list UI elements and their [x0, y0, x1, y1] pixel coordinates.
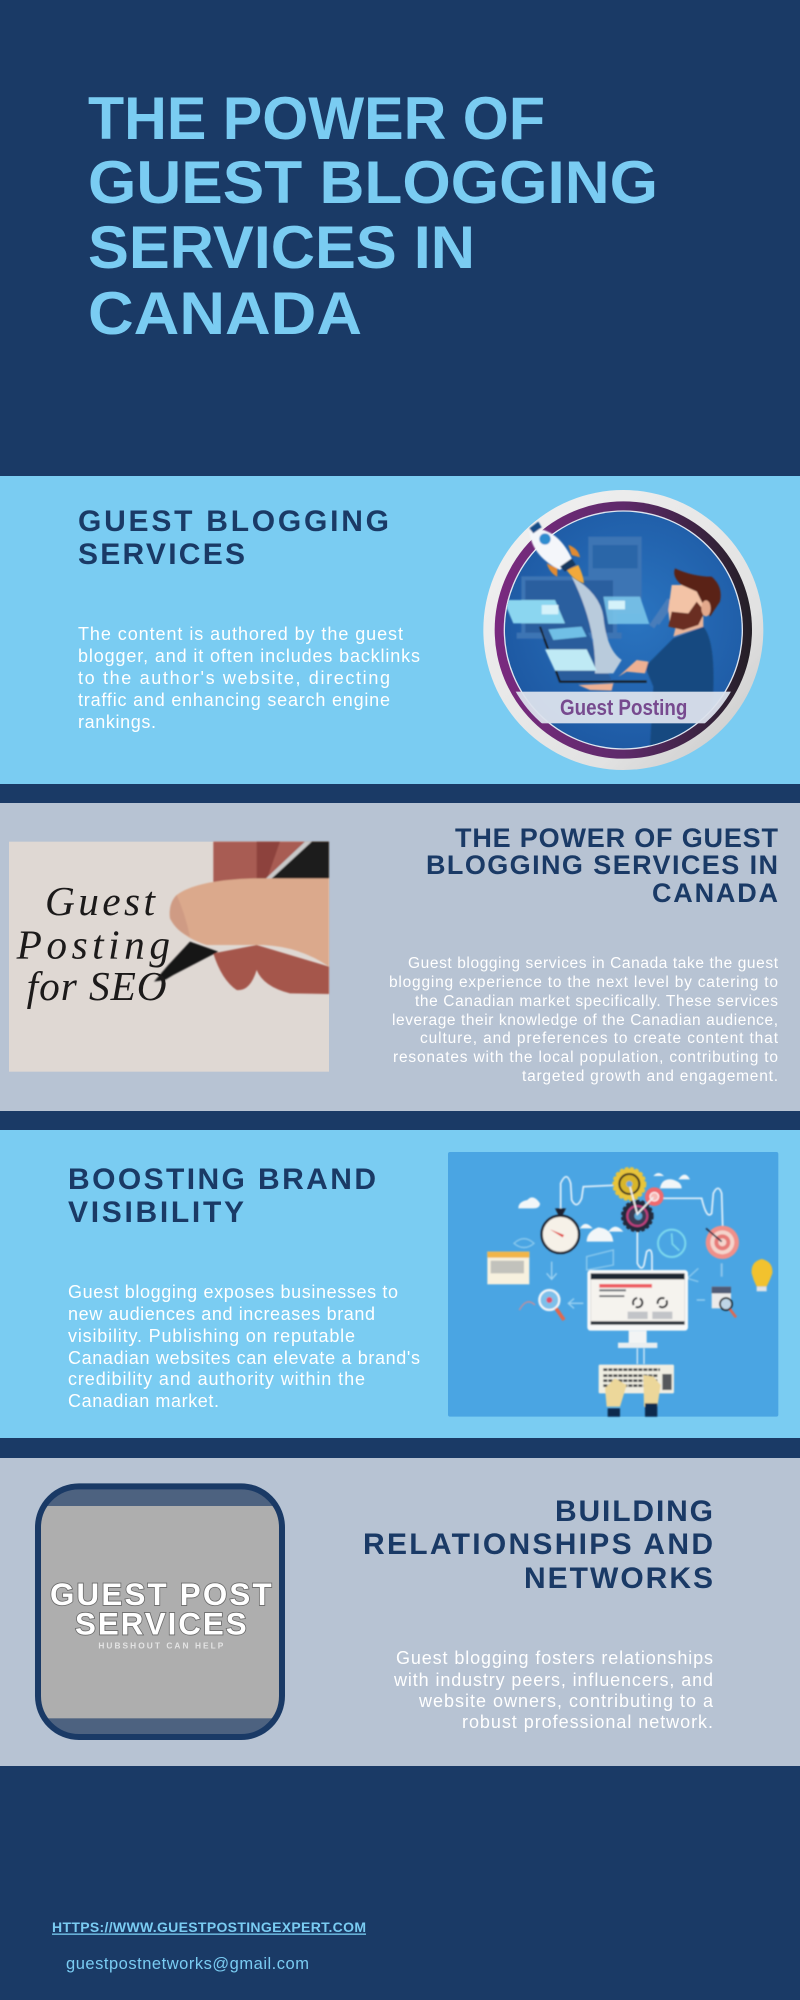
heading: BOOSTING BRAND [68, 1163, 376, 1196]
title [88, 85, 658, 347]
panel: guest blogging services [0, 476, 800, 784]
footer email: guestpostnetworks@gmail.com [66, 1955, 309, 1973]
target [706, 1226, 739, 1259]
neck and face [673, 617, 703, 637]
body text: credibility and authority within the [68, 1369, 365, 1389]
body text [393, 1648, 714, 1732]
handwritten text: Posting [16, 921, 170, 967]
title: SERVICES IN [88, 214, 475, 281]
document [487, 1252, 529, 1284]
heading [363, 1495, 713, 1595]
body text: rankings. [78, 712, 156, 732]
handwritten text [16, 878, 170, 1009]
panel: building relationships and networks [0, 1458, 800, 1766]
panel: the power of guest blogging [0, 803, 800, 1111]
panel: boosting brand visibility [0, 1130, 800, 1438]
body text: culture, and preferences to create content that [420, 1030, 779, 1047]
stopwatch [555, 1208, 566, 1215]
heading: VISIBILITY [68, 1196, 244, 1229]
image: digital marketing illustration [448, 1152, 778, 1417]
hair [674, 568, 721, 617]
heading: GUEST BLOGGING [78, 505, 389, 538]
connector lines [561, 1177, 613, 1210]
body text: robust professional network. [462, 1712, 713, 1732]
laptop [540, 627, 647, 682]
smoke trail [572, 577, 622, 673]
title: THE POWER OF [88, 85, 545, 152]
thumb [170, 878, 329, 967]
lower fingers [213, 945, 329, 994]
clock [658, 1230, 685, 1257]
clouds [518, 1197, 540, 1208]
body text [68, 1282, 420, 1411]
floating panels [503, 600, 565, 623]
heading: THE POWER OF GUEST [455, 823, 778, 853]
body text [389, 955, 779, 1085]
body text: Guest blogging exposes businesses to [68, 1282, 398, 1302]
image: guest post services [37, 1486, 283, 1738]
body text: Canadian websites can elevate a brand's [68, 1348, 420, 1368]
eye and arrows [514, 1239, 534, 1247]
gears [614, 1168, 645, 1200]
panel background [0, 476, 800, 784]
heading: RELATIONSHIPS AND [363, 1528, 713, 1561]
panel background [0, 1130, 800, 1438]
heading: BLOGGING SERVICES IN [426, 850, 778, 880]
keyboard and hands [599, 1365, 674, 1393]
body text: visibility. Publishing on reputable [68, 1326, 355, 1346]
body text: to the author's website, directing [78, 668, 390, 688]
heading: NETWORKS [524, 1562, 713, 1595]
body text [78, 624, 420, 732]
body text: with industry peers, influencers, and [393, 1670, 713, 1690]
beard [668, 602, 705, 630]
upper fingers [213, 842, 329, 883]
body text: Guest blogging fosters relationships [396, 1648, 713, 1668]
small report and lens [712, 1287, 731, 1308]
body text: resonates with the local population, contributing to [393, 1049, 778, 1066]
heading [78, 505, 389, 571]
body text: The content is authored by the guest [78, 624, 403, 644]
title: GUEST BLOGGING [88, 149, 658, 216]
light bulb [752, 1259, 772, 1287]
man body [645, 627, 714, 747]
logo text: GUEST POST [50, 1577, 272, 1612]
heading: CANADA [652, 878, 778, 908]
body text: leverage their knowledge of the Canadian audience, [392, 1012, 778, 1029]
heading [426, 823, 778, 908]
body text: targeted growth and engagement. [522, 1068, 778, 1085]
heading: SERVICES [78, 538, 245, 571]
body text: Guest blogging services in Canada take the guest [408, 955, 779, 972]
hand [578, 660, 648, 691]
caption band [516, 692, 731, 724]
panel background [0, 1458, 800, 1766]
body text: blogging experience to the next level by catering to [389, 974, 778, 991]
rocket [529, 522, 584, 583]
monitor [587, 1270, 688, 1331]
body text: blogger, and it often includes backlinks [78, 646, 420, 666]
logo text: HUBSHOUT CAN HELP [98, 1640, 224, 1650]
caption: Guest Posting [560, 695, 687, 720]
body text: the Canadian market specifically. These services [415, 993, 778, 1010]
panel background [0, 803, 800, 1111]
image: guest posting for SEO [9, 842, 329, 1072]
magnifier [539, 1290, 559, 1310]
heading: BUILDING [555, 1495, 713, 1528]
handwritten text: for SEO [27, 963, 167, 1009]
upper pen [265, 842, 329, 881]
body text: traffic and enhancing search engine [78, 690, 390, 710]
image: guest posting badge [483, 490, 763, 770]
body text: Canadian market. [68, 1391, 219, 1411]
lower pen [154, 942, 218, 982]
logo text [50, 1577, 272, 1650]
logo text: SERVICES [75, 1606, 247, 1641]
footer link: HTTPS://WWW.GUESTPOSTINGEXPERT.COM [52, 1919, 366, 1935]
handwritten text: Guest [45, 878, 157, 924]
heading [68, 1163, 376, 1229]
body text: website owners, contributing to a [418, 1691, 714, 1711]
title: CANADA [88, 280, 362, 347]
body text: new audiences and increases brand [68, 1304, 375, 1324]
